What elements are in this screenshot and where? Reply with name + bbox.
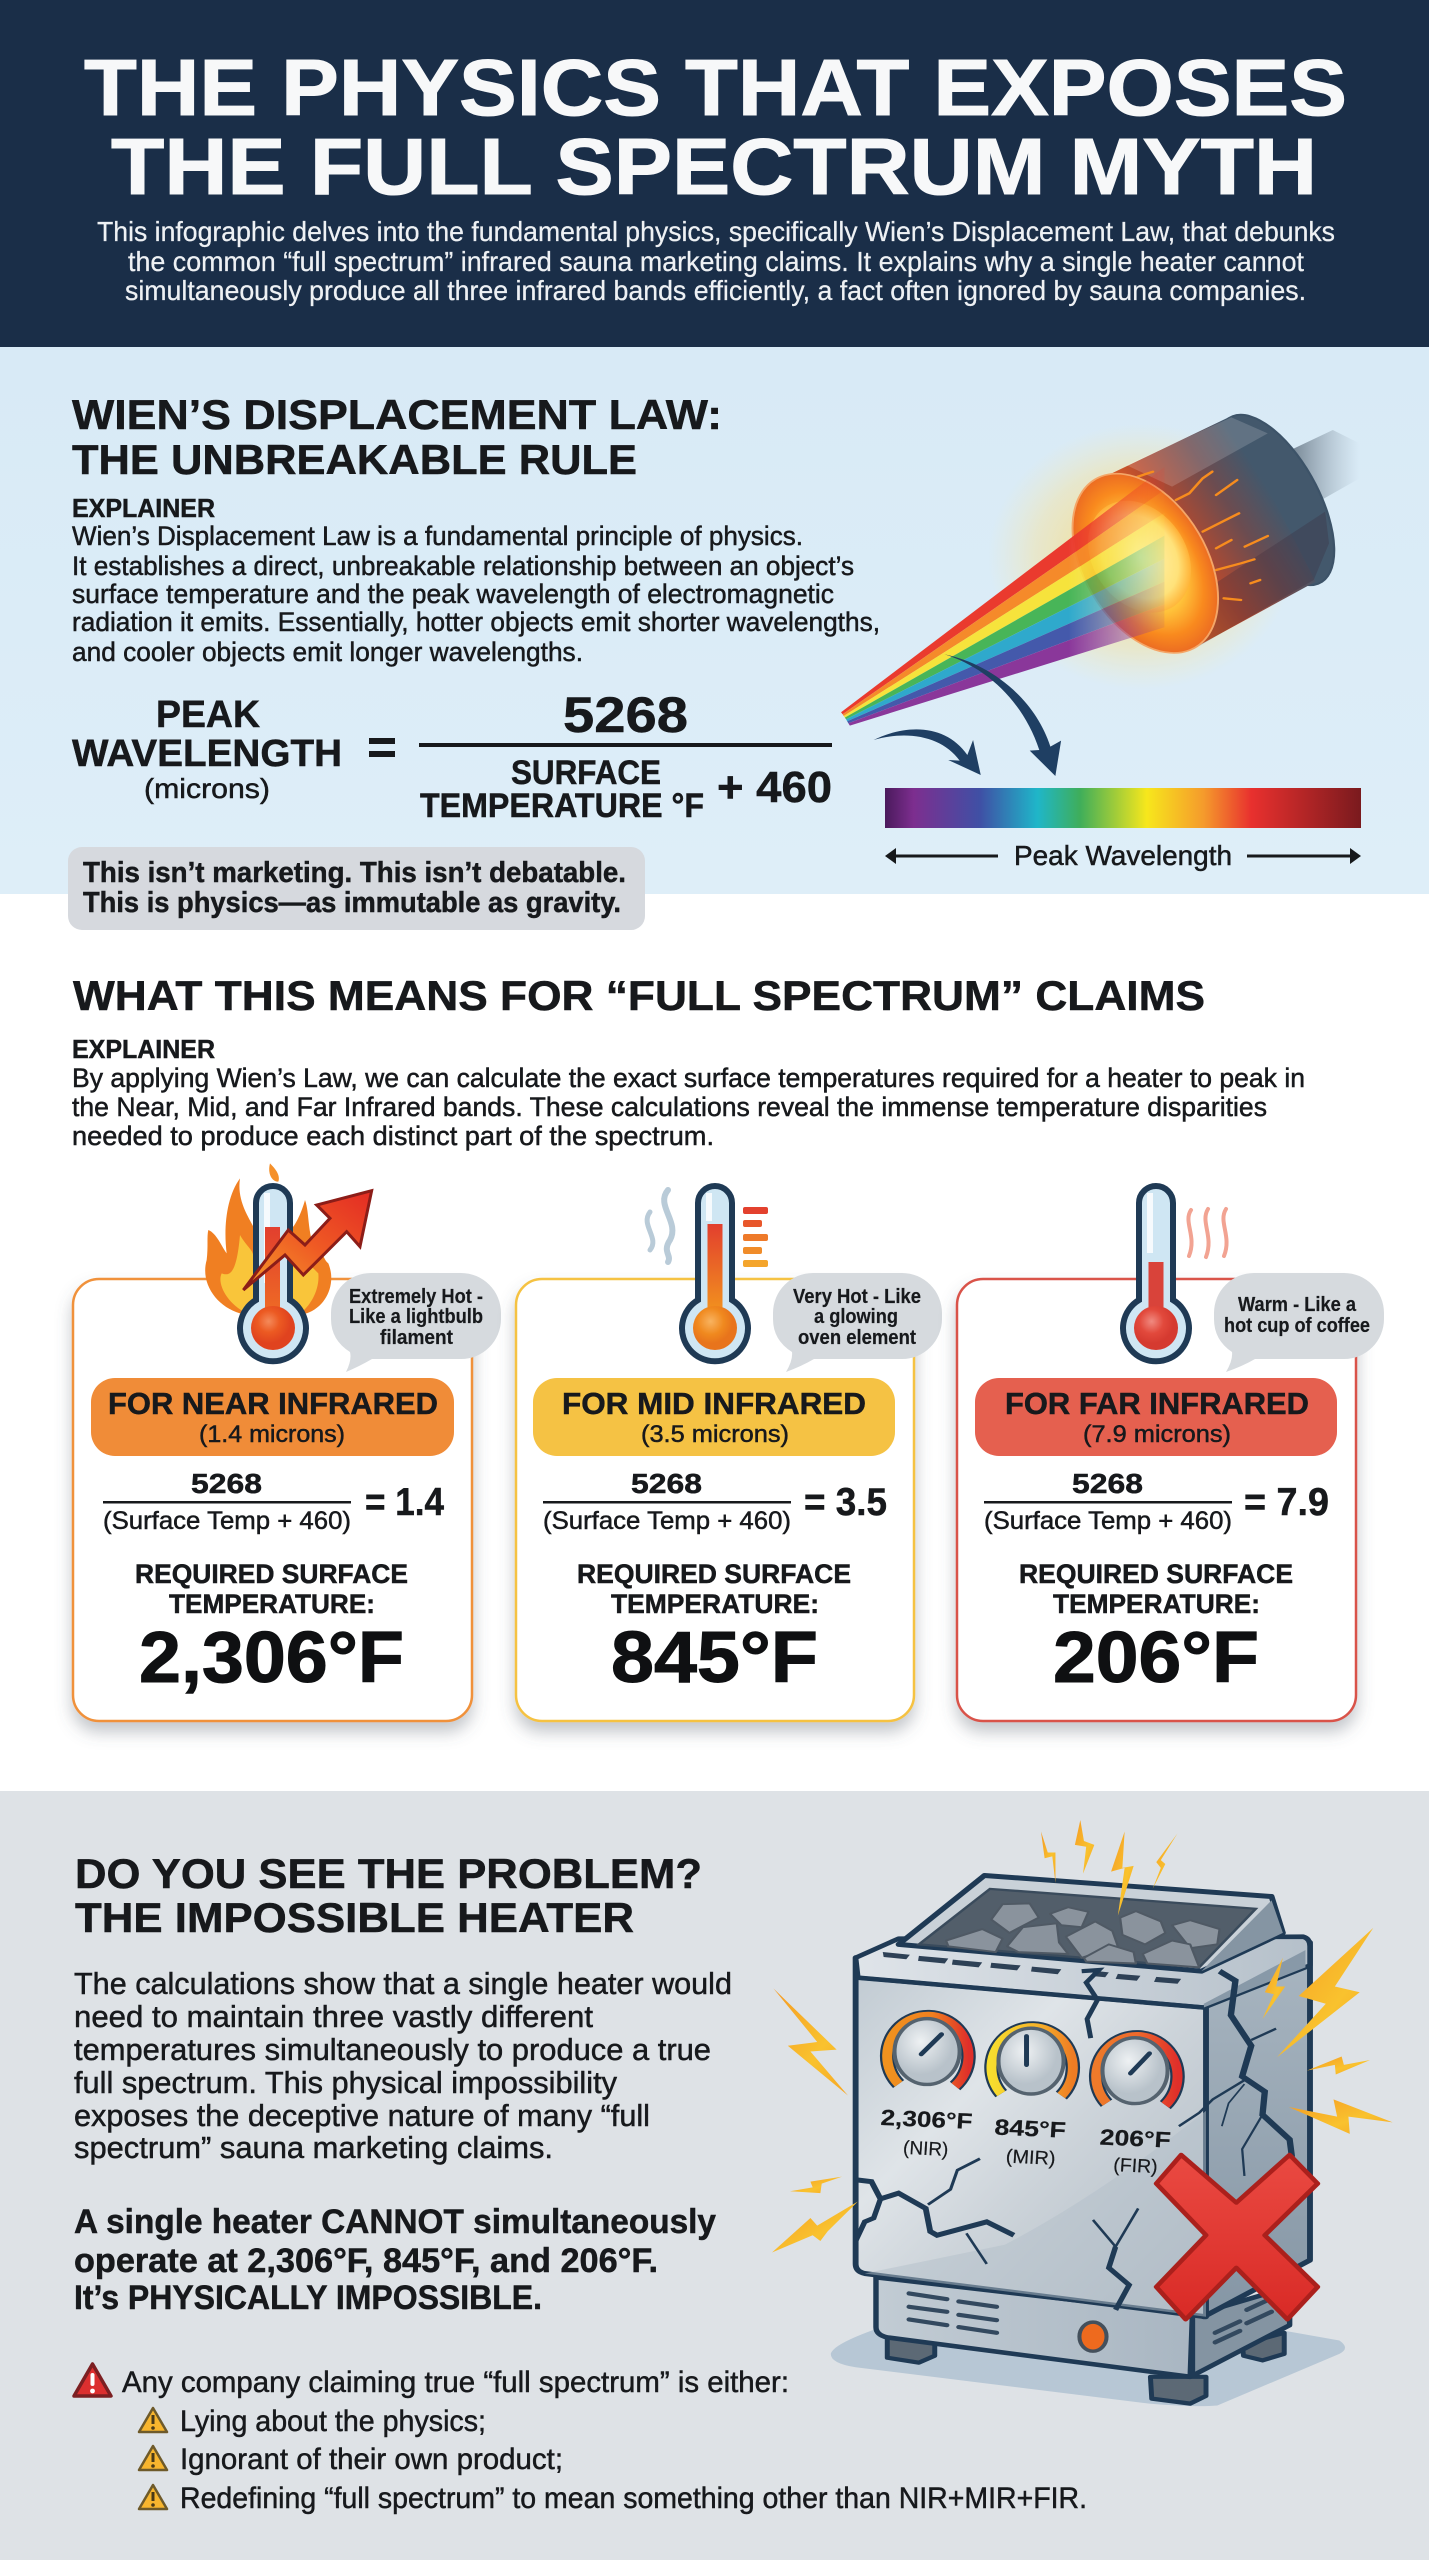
body text: full spectrum. This physical impossibility (74, 2065, 617, 2100)
speech bubble (773, 1273, 942, 1372)
equation (543, 1468, 887, 1535)
gauge labels: 2,306°F (880, 2106, 973, 2134)
heading: WHAT THIS MEANS FOR “FULL SPECTRUM” CLAIMS (73, 972, 1205, 1019)
gauge labels: (MIR) (1005, 2146, 1056, 2169)
speech bubble: a glowing (814, 1306, 898, 1328)
intro text (97, 216, 1335, 306)
callout: this is physics: This is physics—as immutable as gravity. (83, 887, 621, 919)
vents (909, 2293, 1272, 2342)
body text: exposes the deceptive nature of many “full (74, 2098, 650, 2133)
key statement (74, 2203, 716, 2317)
explainer text (72, 493, 880, 667)
card: far infrared (957, 1186, 1384, 1721)
warning list: Any company claiming true “full spectrum” is either: (122, 2366, 789, 2399)
panel: Wien's displacement law (0, 347, 1429, 930)
explainer text: It establishes a direct, unbreakable relationship between an object’s (72, 551, 854, 581)
equation: = 1.4 (365, 1481, 444, 1524)
heading: DO YOU SEE THE PROBLEM? (75, 1850, 702, 1897)
equation: (Surface Temp + 460) (984, 1507, 1232, 1535)
heading: THE UNBREAKABLE RULE (72, 436, 637, 483)
body text: temperatures simultaneously to produce a true (74, 2032, 711, 2067)
required temperature: 845°F (611, 1618, 818, 1698)
explainer text: surface temperature and the peak wavelength of electromagnetic (72, 579, 834, 609)
band label (91, 1378, 454, 1456)
speech bubble: Very Hot - Like (793, 1286, 921, 1308)
gauge labels: (FIR) (1113, 2155, 1158, 2178)
heading: WIEN’S DISPLACEMENT LAW: (72, 391, 722, 438)
warning list: Redefining “full spectrum” to mean something other than NIR+MIR+FIR. (180, 2482, 1087, 2515)
gauge labels: 845°F (994, 2115, 1067, 2143)
callout: this is physics: This isn’t marketing. This isn’t debatable. (83, 857, 626, 889)
explainer text: needed to produce each distinct part of the spectrum. (72, 1121, 714, 1151)
card: mid infrared (516, 1186, 942, 1721)
icon: rising arrow (243, 1191, 372, 1290)
title: THE PHYSICS THAT EXPOSES (84, 43, 1347, 132)
intro text: simultaneously produce all three infrared bands efficiently, a fact often ignored by sauna companies. (125, 275, 1306, 306)
required temperature: TEMPERATURE: (1053, 1589, 1260, 1619)
explainer text: radiation it emits. Essentially, hotter objects emit shorter wavelengths, (72, 607, 880, 637)
explainer text: and cooler objects emit longer wavelengths. (72, 637, 583, 667)
explainer text: Wien’s Displacement Law is a fundamental principle of physics. (72, 521, 803, 551)
peak wavelength axis: Peak Wavelength (1014, 840, 1232, 871)
required temperature: 206°F (1053, 1618, 1259, 1698)
speech bubble: oven element (798, 1327, 916, 1349)
panel: header (0, 0, 1429, 347)
formula: (microns) (144, 773, 270, 804)
equation: = 3.5 (804, 1481, 887, 1524)
gauge labels: 206°F (1099, 2125, 1171, 2153)
required temperature (1019, 1559, 1293, 1698)
band label: (7.9 microns) (1083, 1421, 1231, 1448)
required temperature: 2,306°F (139, 1618, 404, 1698)
gauge labels: (NIR) (902, 2137, 949, 2160)
floor shadow (831, 2329, 1345, 2406)
key statement: operate at 2,306°F, 845°F, and 206°F. (74, 2242, 658, 2280)
title (84, 43, 1347, 211)
callout: this is physics (68, 847, 645, 930)
icon: thermometer (682, 1186, 748, 1361)
icon: thermometer (1123, 1186, 1189, 1361)
equation: 5268 (631, 1468, 702, 1499)
heading: THE IMPOSSIBLE HEATER (75, 1894, 634, 1941)
required temperature (577, 1559, 851, 1698)
arrow: beam to spectrum, short (874, 729, 981, 775)
hopper (899, 1875, 1283, 1971)
equation: (Surface Temp + 460) (543, 1507, 791, 1535)
speech bubble: hot cup of coffee (1224, 1315, 1370, 1337)
band label: (3.5 microns) (641, 1421, 789, 1448)
body text: need to maintain three vastly different (74, 1999, 593, 2034)
equation: 5268 (1072, 1468, 1143, 1499)
title: THE FULL SPECTRUM MYTH (111, 122, 1317, 211)
formula: TEMPERATURE °F (420, 787, 704, 825)
required temperature (135, 1559, 408, 1698)
speech bubble (1214, 1273, 1384, 1372)
equation: 5268 (191, 1468, 262, 1499)
body text: spectrum” sauna marketing claims. (74, 2130, 553, 2165)
indicator light (1079, 2322, 1107, 2351)
illustration: glowing heater emitting rainbow beam (841, 401, 1360, 776)
band label (533, 1378, 895, 1456)
equation: = 7.9 (1244, 1481, 1329, 1524)
illustration: cracked sauna heater (772, 1820, 1393, 2406)
heading (72, 391, 722, 483)
speech bubble (331, 1273, 501, 1372)
icon: heat waves (1188, 1209, 1227, 1257)
required temperature: REQUIRED SURFACE (135, 1559, 408, 1589)
required temperature: REQUIRED SURFACE (1019, 1559, 1293, 1589)
gauge: FIR (1096, 2036, 1178, 2105)
equation (984, 1468, 1329, 1535)
icon: red X (1156, 2155, 1318, 2319)
formula (72, 687, 832, 825)
band label: (1.4 microns) (199, 1421, 345, 1448)
intro text: This infographic delves into the fundamental physics, specifically Wien’s Displacement Law, that debunks (97, 216, 1335, 247)
icon: yellow warning (139, 2485, 167, 2509)
gauge: MIR (991, 2027, 1073, 2096)
speech bubble: Extremely Hot - (349, 1286, 483, 1308)
body text: The calculations show that a single heater would (74, 1966, 732, 2001)
lower base (876, 2277, 1290, 2377)
formula: 5268 (563, 687, 688, 743)
icon: flames (205, 1163, 331, 1313)
top band (856, 1937, 1310, 2008)
gauge: NIR (887, 2016, 969, 2086)
gauge labels (880, 2106, 1171, 2178)
formula: PEAK (156, 694, 261, 736)
warning list: Ignorant of their own product; (180, 2443, 563, 2476)
band label: FOR FAR INFRARED (1005, 1386, 1309, 1421)
band label: FOR NEAR INFRARED (108, 1386, 438, 1421)
band label (975, 1378, 1337, 1456)
key statement: A single heater CANNOT simultaneously (74, 2203, 716, 2241)
card: near infrared (73, 1163, 501, 1721)
feet (887, 2333, 1284, 2404)
peak wavelength axis (885, 840, 1361, 871)
formula: SURFACE (511, 754, 661, 792)
cracks (856, 1970, 1292, 2310)
speech bubble: Like a lightbulb (349, 1306, 483, 1328)
explainer text: EXPLAINER (72, 1034, 215, 1064)
body text (74, 1966, 732, 2165)
key statement: It’s PHYSICALLY IMPOSSIBLE. (74, 2279, 542, 2317)
panel: what this means (0, 894, 1429, 1791)
explainer text: EXPLAINER (72, 493, 215, 523)
required temperature: REQUIRED SURFACE (577, 1559, 851, 1589)
heater body (1204, 1942, 1310, 2317)
warning list (74, 2364, 1087, 2515)
slots (883, 1952, 1181, 1984)
icon: lightning bolts (772, 1820, 1393, 2252)
equation (103, 1468, 444, 1535)
formula: + 460 (717, 763, 832, 812)
warning list: Lying about the physics; (180, 2405, 486, 2438)
icon: yellow warning (139, 2408, 167, 2432)
icon: thermometer (240, 1186, 306, 1361)
required temperature: TEMPERATURE: (169, 1589, 375, 1619)
required temperature: TEMPERATURE: (611, 1589, 819, 1619)
arrow: beam to spectrum, long (944, 654, 1061, 776)
explainer text (72, 1034, 1305, 1151)
icon: scale ticks (743, 1207, 768, 1267)
spectrum bar (885, 788, 1361, 828)
speech bubble: filament (380, 1327, 453, 1349)
icon: yellow warning (139, 2446, 167, 2470)
rocks (946, 1903, 1220, 1967)
explainer text: the Near, Mid, and Far Infrared bands. These calculations reveal the immense temperature disparities (72, 1092, 1267, 1122)
heading (75, 1850, 702, 1941)
equation: (Surface Temp + 460) (103, 1507, 351, 1535)
icon: steam lines (647, 1190, 672, 1262)
speech bubble: Warm - Like a (1238, 1294, 1357, 1316)
intro text: the common “full spectrum” infrared sauna marketing claims. It explains why a single heater cannot (128, 246, 1304, 277)
icon: red warning (74, 2364, 111, 2396)
panel: the impossible heater (0, 1791, 1429, 2560)
band label: FOR MID INFRARED (562, 1386, 866, 1421)
formula: WAVELENGTH (72, 733, 342, 775)
explainer text: By applying Wien’s Law, we can calculate the exact surface temperatures required for a heater to peak in (72, 1063, 1305, 1093)
